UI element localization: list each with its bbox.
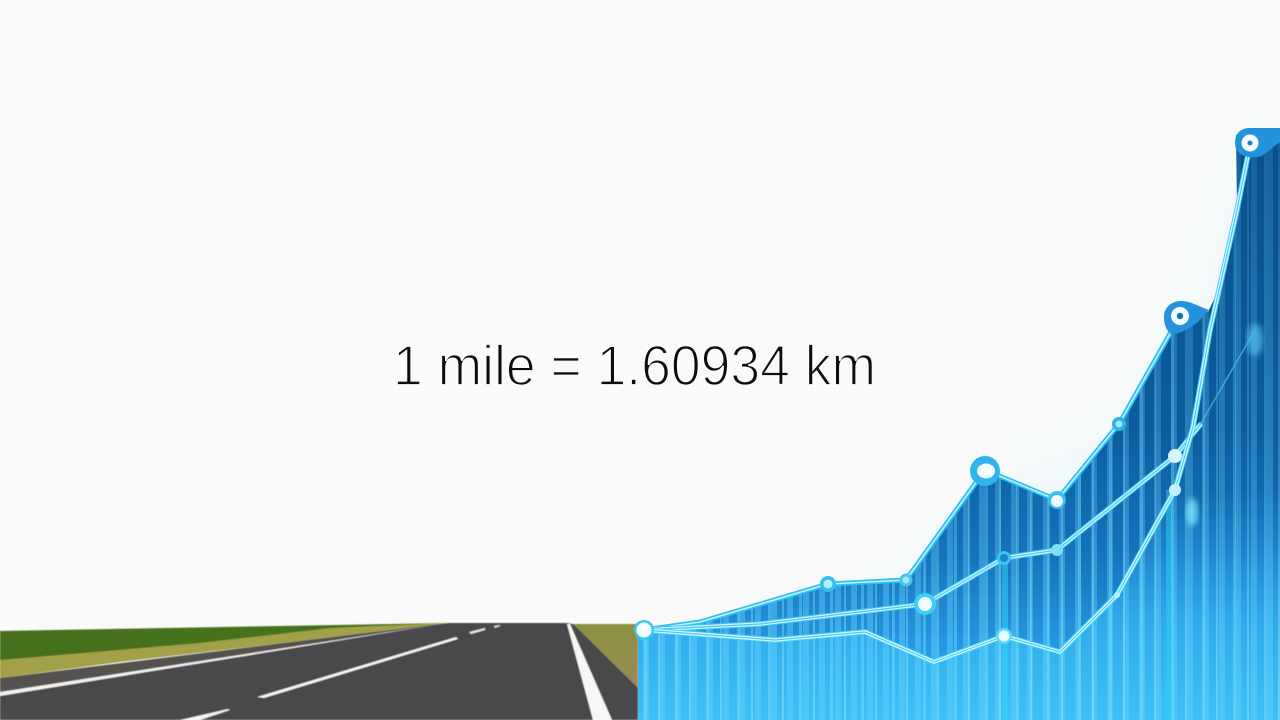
soft glow behind chart: [700, 120, 1280, 620]
right verge: [573, 624, 638, 688]
left yellow verge: [0, 623, 448, 678]
marker: middle series points: [914, 449, 1182, 615]
line: middle series: [644, 330, 1255, 630]
marker: second peak: [1164, 301, 1209, 335]
left shoulder: [0, 624, 440, 692]
line: upper series: [644, 316, 1180, 630]
line: lower series: [644, 145, 1250, 662]
left edge line: [0, 624, 440, 696]
right edge line: [567, 624, 612, 720]
chart: rising line chart: [634, 120, 1280, 720]
marker: peak top: [1235, 128, 1280, 157]
road scene: [0, 623, 638, 720]
left grass: [0, 623, 448, 664]
marker: lower series points: [996, 484, 1181, 644]
marker: upper series points: [820, 417, 1126, 592]
road surface: [0, 623, 638, 720]
chart area fill with stripes: [638, 120, 1280, 720]
title: conversion statement: 1 mile = 1.60934 km: [393, 334, 876, 398]
marker: chart origin: [634, 620, 654, 640]
centre dashes: [257, 637, 458, 698]
